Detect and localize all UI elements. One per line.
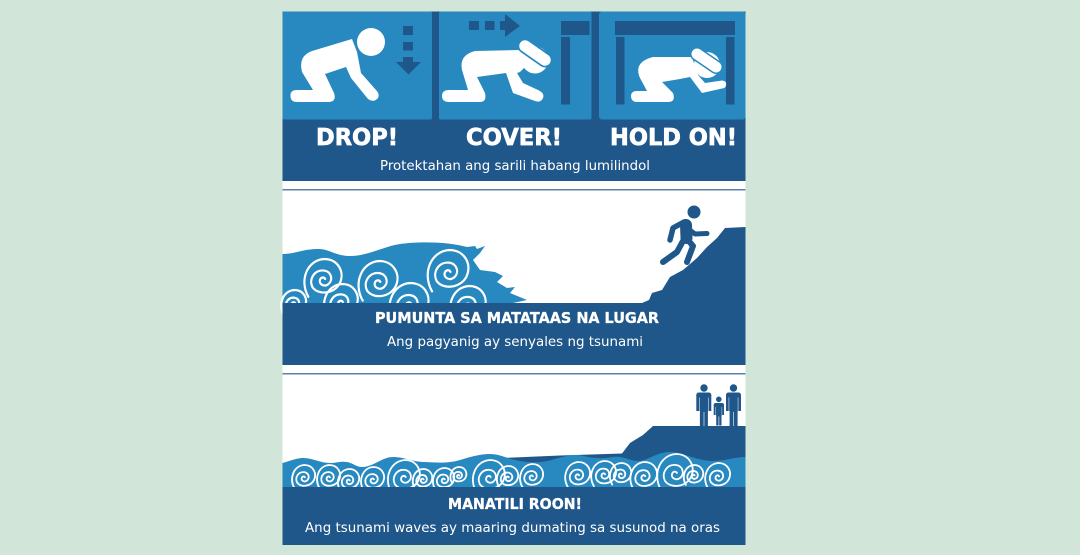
illustration: waves bbox=[282, 452, 746, 492]
icon: holding person bbox=[631, 52, 726, 102]
icon: adult right bbox=[726, 384, 741, 426]
icon: table side bbox=[561, 21, 590, 104]
panel: drop bbox=[282, 12, 432, 120]
illustration: cliff bbox=[503, 426, 746, 470]
caption: waves may arrive: Ang tsunami waves ay maaring dumating sa susunod na oras bbox=[305, 520, 720, 536]
caption: shaking is a sign: Ang pagyanig ay senyales ng tsunami bbox=[387, 334, 643, 350]
heading: stay there: MANATILI ROON! bbox=[448, 495, 582, 513]
panel: drop cover hold on bbox=[282, 12, 746, 181]
icon: table bbox=[615, 21, 735, 104]
illustration: tsunami wave bbox=[281, 242, 527, 323]
icon: climbing person bbox=[663, 206, 707, 262]
caption: protect yourself: Protektahan ang sarili habang lumilindol bbox=[380, 158, 650, 174]
icon: dropping person bbox=[290, 28, 385, 102]
icon: adult left bbox=[696, 384, 711, 426]
icon: covering person bbox=[442, 46, 548, 102]
icon: right arrow bbox=[469, 14, 520, 37]
panel: cover bbox=[439, 12, 592, 120]
icon: child bbox=[714, 396, 724, 426]
heading: hold on: HOLD ON! bbox=[610, 123, 737, 151]
icon: down arrow bbox=[396, 26, 421, 74]
heading: drop: DROP! bbox=[316, 123, 398, 151]
panel: go to high ground bbox=[281, 181, 746, 365]
panel: hold on bbox=[599, 12, 746, 120]
panel: stay there bbox=[282, 365, 746, 545]
icon: family on cliff bbox=[696, 384, 741, 426]
heading: cover: COVER! bbox=[466, 123, 562, 151]
heading: go to high ground: PUMUNTA SA MATATAAS NA LUGAR bbox=[375, 309, 659, 327]
illustration: hill bbox=[642, 227, 746, 303]
